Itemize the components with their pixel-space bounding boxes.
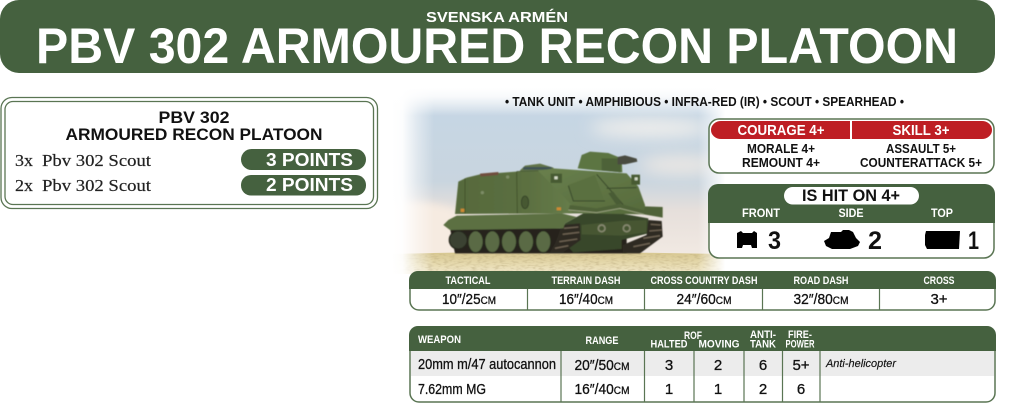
turret bbox=[578, 152, 622, 172]
option row: 3x scout: 3x bbox=[15, 151, 34, 170]
panel: platoon composition bbox=[1, 98, 378, 208]
weapons table bbox=[409, 326, 996, 402]
panel heading: PBV 302 bbox=[158, 108, 230, 127]
movement values: 10″/25CM bbox=[442, 291, 496, 308]
panel: courage and skill bbox=[709, 119, 994, 173]
option row: 2x scout: 2x bbox=[15, 176, 34, 195]
subtitle: Svenska Armén: SVENSKA ARMÉN bbox=[426, 9, 568, 26]
skill header: SKILL 3+ bbox=[892, 122, 950, 139]
armour column labels: TOP bbox=[931, 206, 953, 220]
title: PBV 302 ARMOURED RECON PLATOON bbox=[36, 18, 958, 74]
panel: platoon composition: ARMOURED RECON PLATOON bbox=[66, 125, 322, 144]
running gear shadow bbox=[450, 228, 627, 253]
movement values: 24″/60CM bbox=[676, 291, 732, 308]
skill header bbox=[852, 121, 992, 139]
weapons headers: FIRE- bbox=[788, 329, 812, 341]
armour column labels: SIDE bbox=[838, 206, 864, 220]
movement values: 3+ bbox=[930, 291, 948, 308]
icon: top silhouette bbox=[925, 231, 960, 249]
movement headers: CROSS bbox=[924, 275, 954, 287]
weapon row: 7.62mm MG: 16″/40CM bbox=[574, 381, 630, 398]
assault and counterattack ratings bbox=[860, 141, 982, 170]
weapons headers: POWER bbox=[786, 338, 815, 350]
weapons headers: HALTED bbox=[650, 338, 688, 350]
movement headers: CROSS COUNTRY DASH bbox=[650, 275, 758, 287]
movement values bbox=[442, 291, 948, 308]
weapons headers: WEAPON bbox=[418, 334, 461, 346]
autocannon barrel bbox=[618, 155, 637, 164]
option row: 3x scout: 3 POINTS bbox=[266, 150, 353, 170]
assault and counterattack ratings: ASSAULT 5+ bbox=[886, 141, 956, 156]
movement headers bbox=[446, 275, 954, 287]
armour column labels bbox=[742, 206, 953, 220]
weapon row: 20mm autocannon: Anti-helicopter bbox=[825, 358, 897, 370]
front hull top edge bbox=[568, 204, 663, 218]
weapons headers: ANTI- bbox=[750, 329, 776, 341]
morale and remount ratings bbox=[742, 141, 820, 170]
icon: front silhouette bbox=[737, 231, 757, 248]
icon: side silhouette bbox=[824, 230, 860, 249]
tow rings bbox=[598, 225, 605, 232]
weapon row: 7.62mm MG bbox=[418, 381, 805, 398]
fender bbox=[443, 213, 577, 230]
photo: vehicle on grass against sky bbox=[403, 97, 722, 274]
rear idler and road wheels bbox=[449, 231, 551, 253]
weapons headers: RANGE bbox=[586, 335, 618, 347]
weapons headers: MOVING bbox=[698, 338, 740, 350]
vision blocks bbox=[551, 174, 562, 183]
weapons headers: TANK bbox=[750, 338, 776, 350]
top deck fittings bbox=[520, 164, 555, 172]
lower front hull bbox=[560, 213, 648, 252]
movement headers: ROAD DASH bbox=[794, 275, 849, 287]
is hit on pill: IS HIT ON 4+ bbox=[802, 187, 900, 205]
weapon row: 20mm autocannon: 20″/50CM bbox=[574, 357, 630, 374]
movement values: 32″/80CM bbox=[794, 291, 848, 308]
title banner bbox=[0, 0, 995, 74]
option row: 3x scout: Pbv 302 Scout bbox=[42, 151, 151, 170]
option row: 2x scout: 2 POINTS bbox=[266, 175, 353, 195]
movement values: 16″/40CM bbox=[559, 291, 613, 308]
option row: 2x scout: Pbv 302 Scout bbox=[42, 176, 151, 195]
side armour value: 2 bbox=[868, 227, 882, 255]
front armour value: 3 bbox=[768, 227, 781, 255]
weapon row: 20mm autocannon: 20mm m/47 autocannon bbox=[418, 357, 556, 373]
panel: armour bbox=[708, 184, 995, 258]
morale and remount ratings: REMOUNT 4+ bbox=[742, 155, 820, 170]
weapon row: 20mm autocannon bbox=[418, 357, 897, 374]
movement table bbox=[409, 271, 996, 310]
movement headers: TERRAIN DASH bbox=[552, 275, 621, 287]
option row: 3x scout bbox=[15, 149, 366, 170]
morale and remount ratings: MORALE 4+ bbox=[747, 141, 815, 156]
armour column labels: FRONT bbox=[742, 206, 781, 220]
icon: PBV 302 vehicle bbox=[443, 152, 663, 253]
weapon row: 7.62mm MG: 7.62mm MG bbox=[418, 382, 486, 398]
assault and counterattack ratings: COUNTERATTACK 5+ bbox=[860, 155, 982, 170]
weapons headers: ROF bbox=[684, 330, 702, 342]
weapon row: 7.62mm MG: 6 bbox=[797, 381, 805, 398]
tracks bbox=[560, 223, 581, 248]
weapon row: 20mm autocannon: 2 bbox=[714, 357, 722, 374]
option row: 2x scout bbox=[15, 175, 366, 196]
weapon row: 7.62mm MG: 1 bbox=[714, 381, 722, 398]
weapon row: 20mm autocannon: 5+ bbox=[792, 357, 810, 374]
shaded row bbox=[411, 351, 994, 376]
weapon row: 20mm autocannon: 3 bbox=[665, 357, 673, 374]
courage header bbox=[711, 121, 850, 139]
weapon row: 7.62mm MG: 1 bbox=[665, 381, 673, 398]
weapons headers bbox=[418, 329, 815, 350]
top armour value: 1 bbox=[968, 227, 979, 255]
movement headers: TACTICAL bbox=[446, 275, 491, 287]
unit keywords line: • TANK UNIT • AMPHIBIOUS • INFRA-RED (IR) • SCOUT • SPEARHEAD • bbox=[505, 95, 904, 109]
courage header: COURAGE 4+ bbox=[738, 122, 825, 139]
weapon row: 7.62mm MG: 2 bbox=[759, 381, 767, 398]
upper front glacis bbox=[537, 168, 645, 214]
weapon row: 20mm autocannon: 6 bbox=[759, 357, 767, 374]
side hull bbox=[455, 171, 572, 214]
